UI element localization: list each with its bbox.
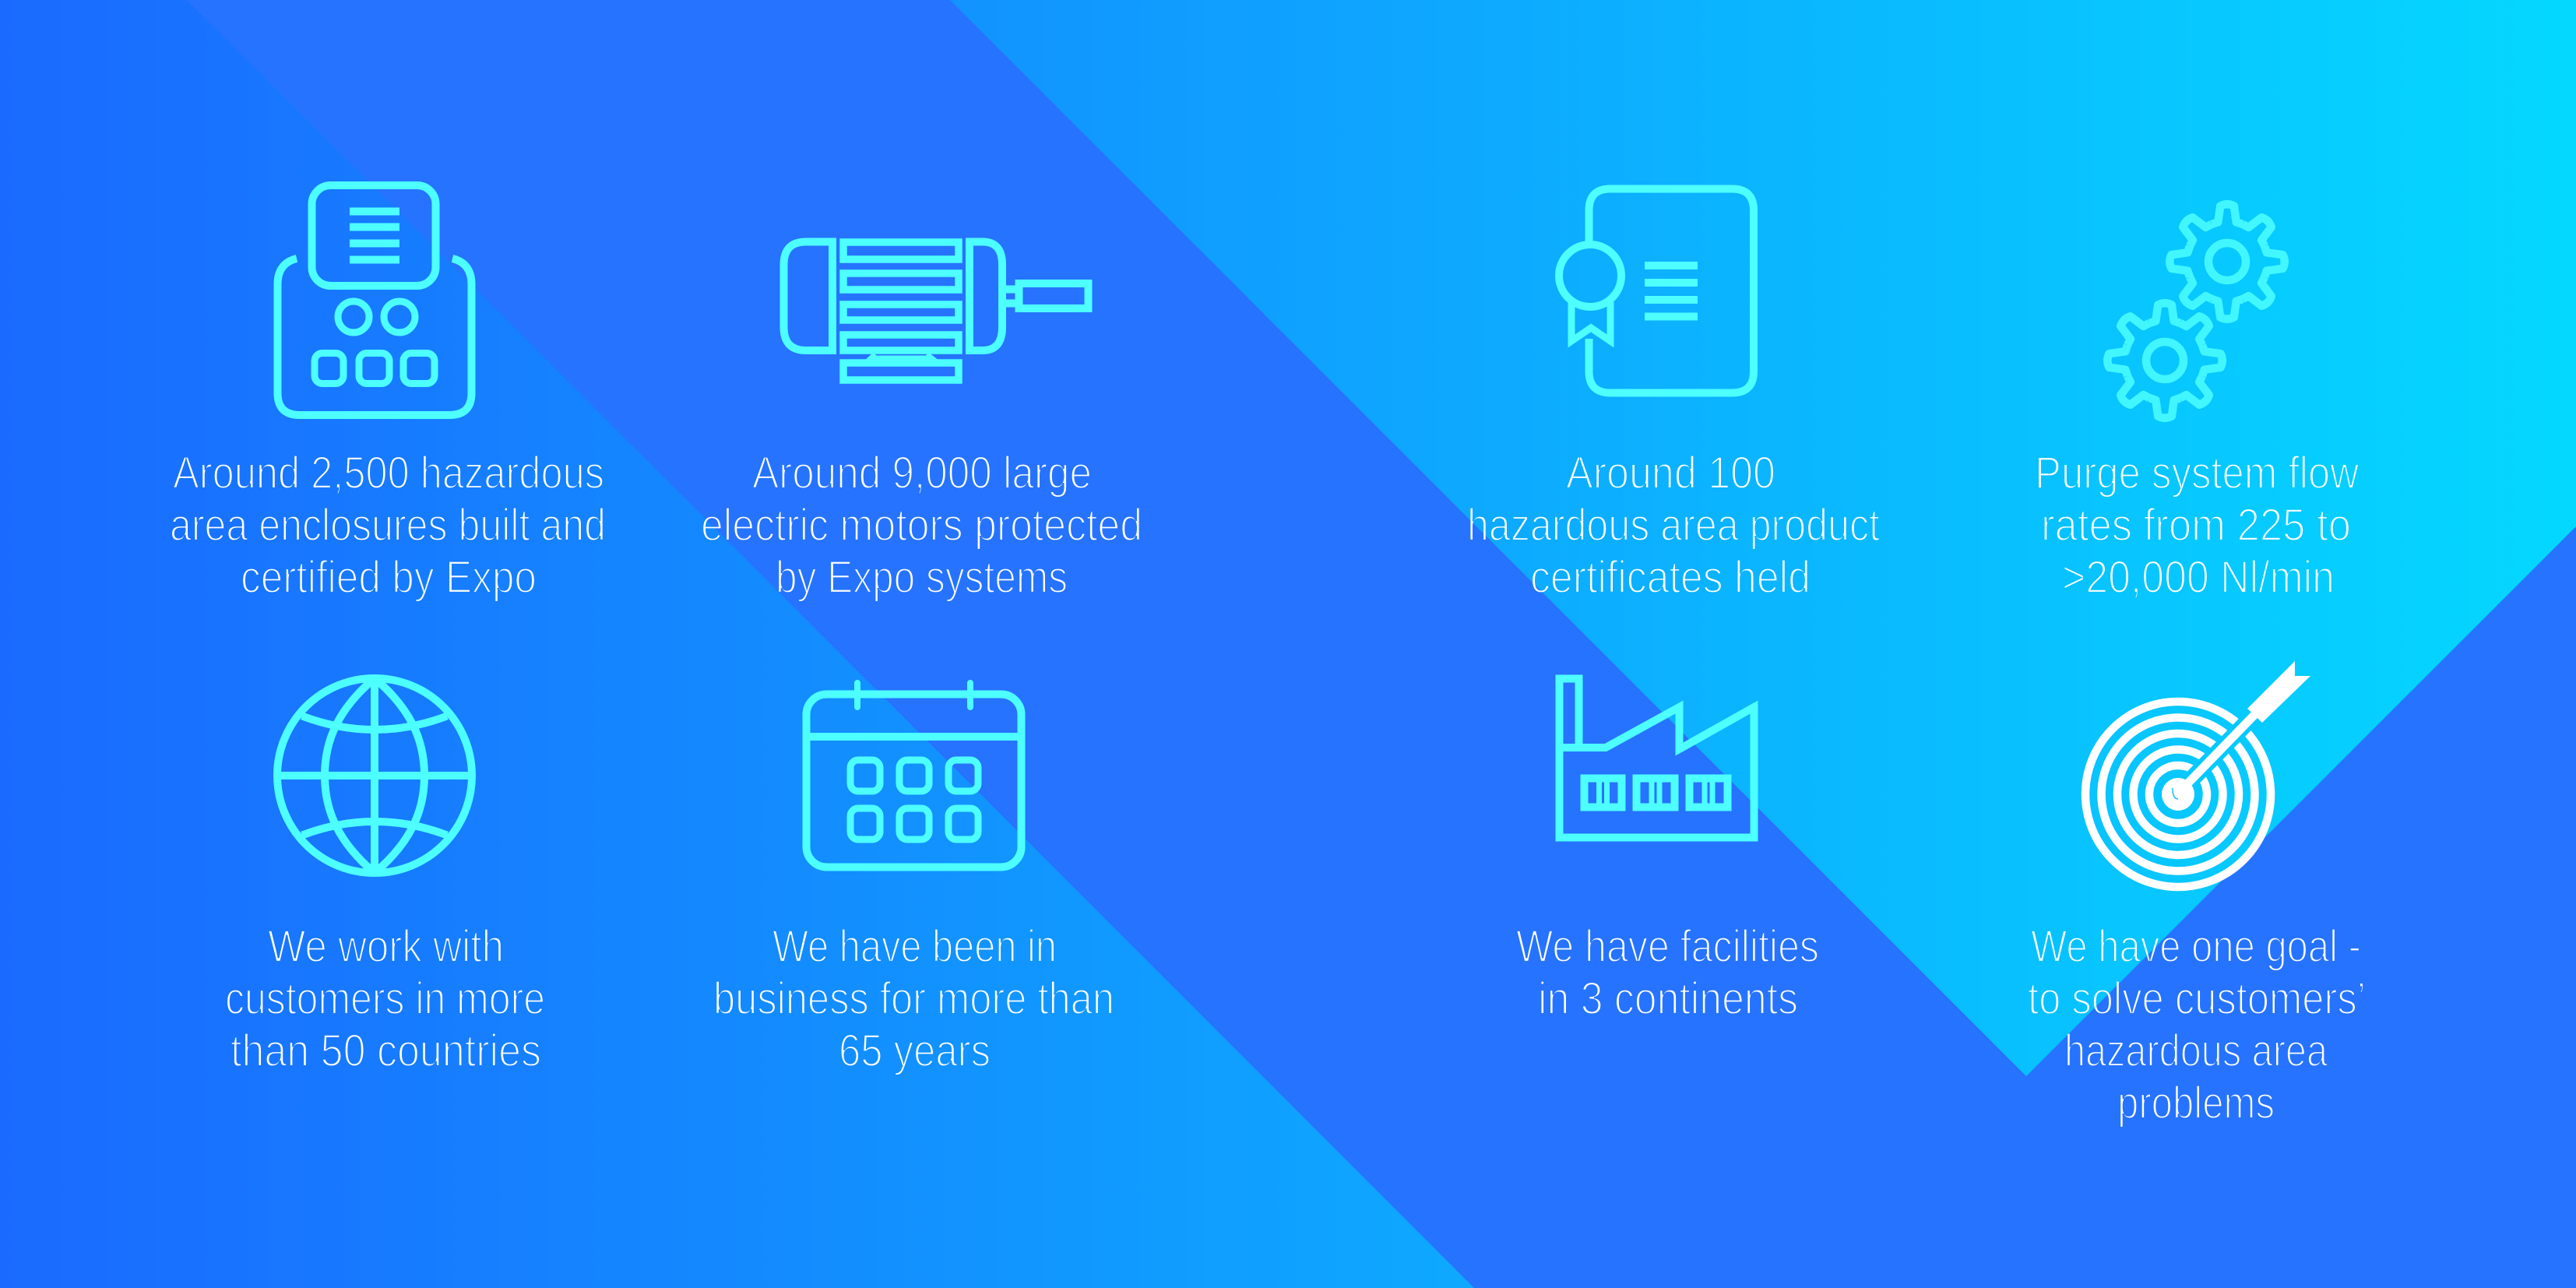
text: years in business: 65 years (839, 1026, 991, 1076)
icon: factory (1559, 679, 1754, 838)
icon: gears (2107, 204, 2285, 418)
text: purge flow rates (2035, 448, 2360, 603)
text: one goal: problems (2117, 1078, 2275, 1128)
text: countries: than 50 countries (231, 1026, 541, 1076)
text: years in business (713, 921, 1114, 1076)
text: motors (701, 448, 1142, 603)
icon: certificate (1559, 188, 1754, 392)
text: countries (225, 921, 545, 1076)
text: facilities: in 3 continents (1538, 973, 1798, 1024)
text: motors: by Expo systems (776, 552, 1068, 603)
text: one goal: We have one goal - (2031, 921, 2361, 972)
text: certificates (1467, 448, 1880, 603)
text: years in business: We have been in (772, 921, 1057, 972)
icon: enclosure (277, 185, 472, 415)
text: facilities: We have facilities (1516, 921, 1819, 972)
text: one goal (2028, 921, 2366, 1128)
text: motors: Around 9,000 large (752, 448, 1092, 498)
text: enclosures: Around 2,500 hazardous (173, 448, 604, 498)
text: enclosures (170, 448, 606, 603)
text: enclosures: certified by Expo (241, 552, 537, 603)
text: motors: electric motors protected (701, 500, 1142, 551)
text: countries: customers in more (225, 973, 545, 1024)
icon: electric motor (783, 241, 1089, 380)
text: one goal: to solve customers’ (2028, 973, 2366, 1024)
text: certificates: Around 100 (1566, 448, 1775, 498)
text: facilities (1516, 921, 1819, 1024)
icon: calendar (806, 683, 1022, 867)
text: certificates: certificates held (1530, 552, 1811, 603)
text: purge flow rates: rates from 225 to (2041, 500, 2351, 551)
text: purge flow rates: Purge system flow (2035, 448, 2360, 498)
text: certificates: hazardous area product (1467, 500, 1880, 551)
icon: target with arrow (2085, 661, 2310, 887)
text: countries: We work with (268, 921, 504, 972)
text: one goal: hazardous area (2064, 1026, 2328, 1076)
text: years in business: business for more than (713, 973, 1114, 1024)
text: enclosures: area enclosures built and (170, 500, 606, 551)
text: purge flow rates: >20,000 Nl/min (2062, 552, 2335, 603)
icon: globe (277, 678, 472, 873)
